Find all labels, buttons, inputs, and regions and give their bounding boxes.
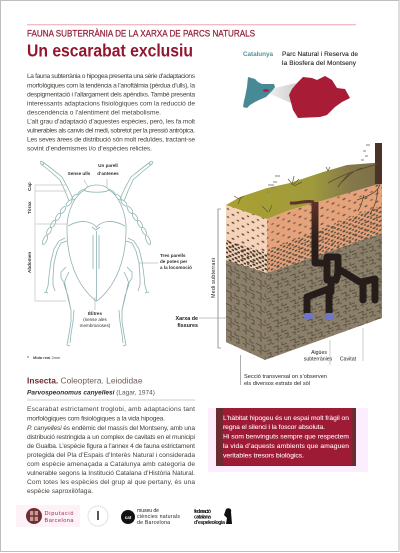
beetle labels: (sense ales bbox=[83, 317, 107, 322]
beetle drawing bbox=[40, 161, 153, 346]
species heading: Parvospeonomus canyellesi (Lagar, 1974) bbox=[27, 390, 155, 396]
callout: la vida d’aquests ambients que amaguen bbox=[223, 443, 349, 450]
logo: museu de ciències naturals bbox=[121, 508, 180, 526]
species description text: protegida del Pla d’Espais d’Interès Natural i considerada bbox=[27, 452, 195, 459]
intro text block: L’alt grau d’adaptació d’aquestes espècies, però, les fa molt bbox=[27, 118, 195, 126]
surface layer bbox=[226, 163, 382, 219]
species description text: morfològiques com fisiològiques a la vida hipogea. bbox=[27, 416, 165, 423]
logo: Diputació de Barcelona: Diputació bbox=[44, 511, 74, 517]
intro text block: interessants adaptacions fisiològiques com la reducció de bbox=[27, 100, 195, 108]
section caption: els diversos estrats del sòl bbox=[244, 381, 310, 387]
map labels: la Biosfera del Montseny bbox=[282, 60, 357, 67]
map of Catalonia bbox=[243, 77, 275, 108]
beetle labels: Un parell bbox=[98, 163, 118, 168]
logo: federació espeleologia: catalana bbox=[194, 514, 211, 520]
body part brackets bbox=[27, 182, 67, 301]
water and cavity labels bbox=[304, 328, 363, 365]
park marker small bbox=[263, 89, 269, 92]
cave system bbox=[290, 201, 375, 312]
footer logos bbox=[16, 505, 232, 527]
logo: museu de ciències naturals: cat bbox=[125, 515, 132, 520]
locator map bbox=[243, 51, 358, 118]
soil cross-section bbox=[176, 143, 382, 387]
logo: federació espeleologia: d’espeleologia bbox=[194, 520, 225, 526]
water and cavity labels: Aigües bbox=[311, 350, 327, 356]
header rule and section heading: FAUNA SUBTERRÀNIA DE LA XARXA DE PARCS NATURALS bbox=[27, 28, 255, 38]
roots bbox=[328, 164, 380, 214]
logo: Diputació de Barcelona: Barcelona bbox=[44, 518, 74, 524]
medium bracket: Medi subterrani bbox=[211, 258, 217, 298]
trunk bbox=[375, 143, 382, 184]
soil block bbox=[226, 143, 382, 360]
logo: federació espeleologia bbox=[194, 508, 232, 526]
intro text block: sovint d’endemismes i/o d’espècies relictes. bbox=[27, 146, 152, 152]
callout: L’hàbitat hipogeu és un espai molt fràgil on bbox=[223, 415, 349, 422]
callout: veritables tresors biològics. bbox=[223, 452, 304, 460]
logo: museu de ciències naturals: de Barcelona bbox=[137, 520, 170, 526]
species description text: P. canyellesi és endèmic del massís del Montseny, amb una bbox=[27, 425, 195, 432]
species heading: Insecta. Coleoptera. Leiodidae bbox=[27, 376, 143, 386]
species description text: distribució restringida a un complex de cavitats en el municipi bbox=[27, 434, 196, 441]
beetle labels: d’antenes bbox=[97, 171, 119, 176]
water and cavity labels: Cavitat bbox=[340, 356, 357, 362]
park shape bbox=[289, 76, 350, 118]
medium bracket bbox=[211, 209, 221, 348]
callout bbox=[208, 408, 368, 472]
map labels: Parc Natural i Reserva de bbox=[282, 51, 358, 58]
callout: regna el silenci i la foscor absoluta. bbox=[223, 424, 325, 431]
logo: Diputació de Barcelona bbox=[16, 505, 80, 527]
intro text block: descendència o l’alentiment del metabolisme. bbox=[27, 110, 161, 116]
beetle labels: de potes per bbox=[160, 259, 188, 264]
beetle diagram bbox=[27, 161, 192, 360]
beetle labels: a la locomoció bbox=[160, 265, 192, 270]
logo: seal bbox=[88, 506, 108, 526]
intro text block: despigmentació i l’allargament dels apèndixs. També presenta bbox=[27, 91, 195, 98]
intro text block: morfològiques com la tendència a l’anoftàlmia (pèrdua d’ulls), la bbox=[27, 82, 195, 89]
section caption: Secció transversal on s’observen bbox=[244, 374, 327, 380]
body part brackets: Tòrax bbox=[27, 201, 32, 214]
beetle labels bbox=[68, 163, 192, 328]
beetle labels: Èlitres bbox=[88, 309, 102, 316]
intro text block bbox=[27, 73, 196, 152]
species heading bbox=[27, 376, 195, 400]
map labels: Catalunya bbox=[243, 51, 273, 58]
logo: federació espeleologia: federació bbox=[194, 509, 211, 515]
logo: museu de ciències naturals: museu de bbox=[137, 508, 159, 514]
grass bbox=[234, 167, 330, 212]
real size note: Mida real 2mm bbox=[33, 355, 61, 360]
fissure network label bbox=[176, 316, 228, 329]
map labels bbox=[243, 51, 358, 67]
section caption bbox=[240, 355, 327, 387]
species description text: vulnerable segons la Institució Catalana d’Història Natural. bbox=[27, 470, 195, 477]
subsoil layer bbox=[226, 205, 267, 273]
species description text: espècie saproxilòfaga. bbox=[27, 488, 93, 495]
species description text: com espècie amenaçada a Catalunya amb categoria de bbox=[27, 461, 195, 468]
water and cavity labels: subterrànies bbox=[304, 356, 333, 362]
beetle labels: membranoses) bbox=[80, 323, 111, 328]
beetle labels: Tres parells bbox=[160, 253, 186, 258]
rock layer bbox=[226, 233, 382, 360]
title: Un escarabat exclusiu bbox=[27, 40, 193, 60]
species description text: Com totes les espècies del grup al que pertany, és una bbox=[27, 479, 195, 486]
intro text block: vulnerables als canvis del medi, sobretot per la pressió antròpica. bbox=[27, 128, 195, 134]
underground water bbox=[304, 313, 334, 320]
intro text block: Les seves àrees de distribució són molt reduïdes, tractant-se bbox=[27, 136, 195, 144]
intro text block: La fauna subterrània o hipogea presenta una sèrie d’adaptacions bbox=[27, 73, 196, 80]
body part brackets: Abdomen bbox=[27, 252, 32, 273]
zoom wedge bbox=[268, 83, 296, 103]
body part brackets: Cap bbox=[27, 182, 32, 191]
logo: museu de ciències naturals: ciències naturals bbox=[137, 514, 180, 520]
species description text bbox=[27, 406, 196, 495]
species description text: de Gualba. L’espècie figura a l’annex 4 de fauna estrictament bbox=[27, 443, 195, 450]
callout: Hi som benvinguts sempre que respectem bbox=[223, 434, 349, 440]
fissure network label: Xarxa de bbox=[176, 316, 198, 322]
species description text: Escarabat estrictament troglobi, amb adaptacions tant bbox=[27, 406, 195, 413]
fissure network label: fissures bbox=[177, 323, 198, 329]
beetle labels: Sense ulls bbox=[68, 171, 91, 176]
